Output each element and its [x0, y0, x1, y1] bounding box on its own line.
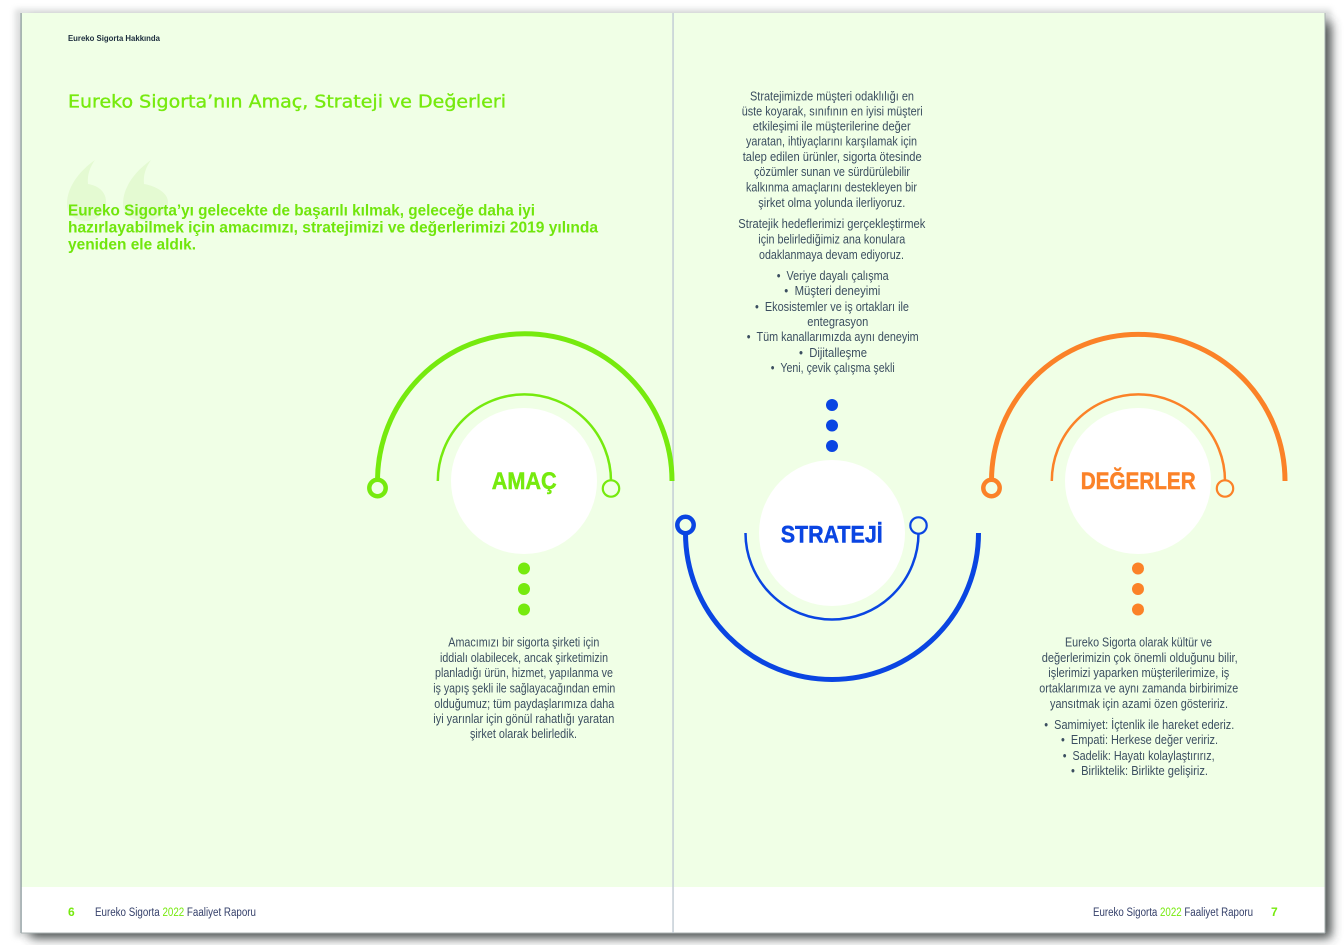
title: Eureko Sigorta’nın Amaç, Strateji ve Değerleri: [68, 92, 506, 112]
text: strateji: Stratejik hedeflerimizi gerçekleştirmek: [738, 217, 926, 231]
text: strateji: • Ekosistemler ve iş ortakları ile: [755, 300, 909, 314]
footer left: Eureko Sigorta 2022 Faaliyet Raporu: [95, 907, 256, 919]
diagram: strateji: [677, 399, 978, 680]
intro quote: yeniden ele aldık.: [68, 236, 196, 254]
text: strateji: entegrasyon: [807, 315, 868, 329]
text: amaç: [433, 636, 615, 741]
text: amaç: planladığı ürün, hizmet, yapılanma ve: [435, 666, 613, 680]
text: strateji: • Müşteri deneyimi: [784, 284, 880, 298]
text: strateji: şirket olma yolunda ilerliyoruz.: [758, 196, 905, 210]
intro quote: Eureko Sigorta’yı gelecekte de başarılı kılmak, geleceğe daha iyi: [68, 202, 535, 220]
text: amaç: iddialı olabilecek, ancak şirketimizin: [440, 651, 608, 665]
text: değerler: işlerimizi yaparken müşterilerimize, iş: [1048, 666, 1229, 680]
text: strateji: talep edilen ürünler, sigorta ötesinde: [743, 150, 922, 164]
text: strateji: kalkınma amaçlarını destekleyen bir: [746, 180, 917, 194]
text: amaç: Amacımızı bir sigorta şirketi için: [448, 636, 599, 650]
diagram: amaç: AMAÇ: [492, 468, 557, 495]
intro quote: hazırlayabilmek için amacımızı, stratejimizi ve değerlerimizi 2019 yılında: [68, 220, 598, 236]
text: değerler: değerlerimizin çok önemli olduğunu bilir,: [1042, 651, 1238, 665]
text: strateji: • Tüm kanallarımızda aynı deneyim: [747, 330, 919, 344]
text: strateji: • Veriye dayalı çalışma: [777, 269, 889, 283]
text: strateji: için belirlediğimiz ana konulara: [758, 232, 905, 246]
footer right: 7: [1271, 905, 1278, 919]
text: strateji: Stratejimizde müşteri odaklılığı en: [750, 90, 914, 104]
text: strateji: üste koyarak, sınıfının en iyisi müşteri: [742, 104, 923, 118]
footer right: Eureko Sigorta 2022 Faaliyet Raporu: [1093, 907, 1253, 919]
text: amaç: olduğumuz; tüm paydaşlarımıza daha: [434, 697, 614, 711]
footer left: 6: [68, 905, 75, 919]
text: strateji: etkileşimi ile müşterilerine değer: [753, 120, 911, 134]
text: değerler: • Empati: Herkese değer veririz.: [1061, 733, 1218, 747]
running header: Eureko Sigorta Hakkında: [68, 33, 160, 43]
text: strateji: • Yeni, çevik çalışma şekli: [771, 361, 895, 375]
text: değerler: yansıtmak için azami özen gösteririz.: [1050, 697, 1228, 711]
icon: quotation marks: [67, 160, 168, 221]
text: strateji: [738, 90, 926, 375]
text: strateji: yaratan, ihtiyaçlarını karşılamak için: [746, 134, 917, 148]
footer left: [68, 905, 256, 919]
text: değerler: [1039, 636, 1238, 778]
diagram: değerler: DEĞERLER: [1081, 467, 1196, 495]
text: amaç: şirket olarak belirledik.: [470, 727, 577, 741]
text: değerler: • Sadelik: Hayatı kolaylaştırırız,: [1063, 749, 1215, 763]
text: amaç: iş yapış şekli ile sağlayacağından emin: [433, 682, 615, 696]
text: değerler: • Samimiyet: İçtenlik ile hareket ederiz.: [1044, 718, 1234, 732]
text: değerler: • Birliktelik: Birlikte gelişiriz.: [1071, 764, 1208, 778]
text: amaç: iyi yarınlar için gönül rahatlığı yaratan: [433, 712, 614, 726]
diagram: değerler: [983, 334, 1285, 616]
diagram: amaç: [369, 334, 672, 616]
intro quote: [68, 202, 598, 254]
text: strateji: • Dijitalleşme: [799, 346, 867, 360]
text: değerler: ortaklarımıza ve aynı zamanda birbirimize: [1039, 682, 1238, 696]
text: strateji: çözümler sunan ve sürdürülebilir: [754, 165, 910, 179]
text: değerler: Eureko Sigorta olarak kültür ve: [1065, 636, 1212, 650]
diagram: strateji: STRATEJİ: [781, 521, 883, 548]
text: strateji: odaklanmaya devam ediyoruz.: [759, 248, 904, 262]
